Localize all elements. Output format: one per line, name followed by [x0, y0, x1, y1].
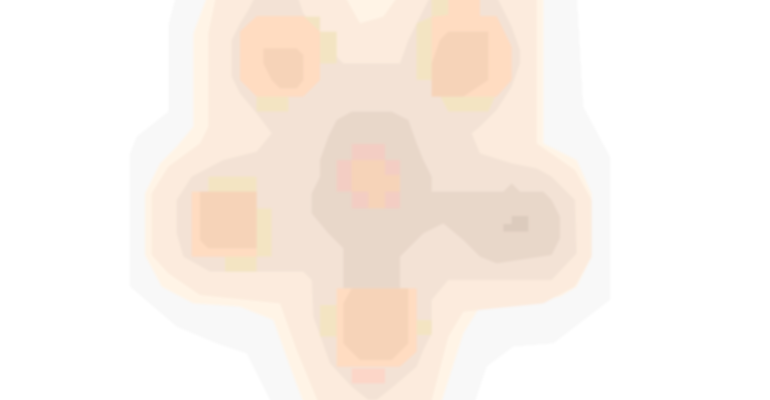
upper-left node	[240, 16, 337, 112]
left node	[192, 177, 272, 272]
top centre cream notch	[343, 0, 400, 23]
central hub and right arm	[312, 112, 560, 290]
upper-right node	[417, 0, 512, 112]
cream edge	[145, 0, 592, 400]
right node dark core	[503, 216, 528, 232]
outer grey halo	[130, 0, 610, 400]
star graphic	[130, 0, 610, 400]
beige star interior	[177, 0, 577, 400]
peach star body	[152, 0, 592, 400]
bottom node	[320, 288, 432, 383]
centre node	[337, 144, 400, 208]
